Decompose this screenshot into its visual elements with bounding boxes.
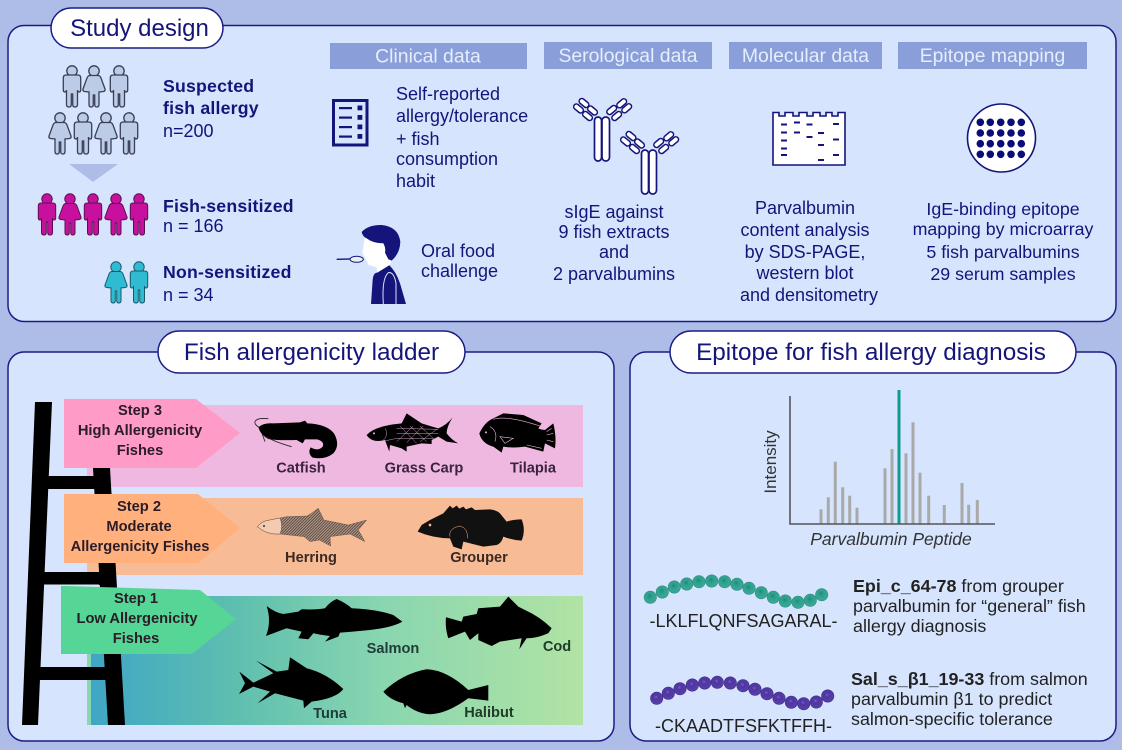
fish: catfish xyxy=(255,418,337,458)
text: sIgE: 9 fish extracts xyxy=(558,222,670,242)
header: clinical data xyxy=(330,43,527,69)
arrow: step 3 xyxy=(64,399,240,468)
icon: fish-sensitized people xyxy=(38,194,148,235)
sequence: teal: -LKLFLQNFSAGARAL- xyxy=(649,611,838,631)
labels: low allergenicity fishes: Salmon xyxy=(367,641,419,657)
icon: suspected group people xyxy=(49,66,138,154)
text: Epi_c_64-78: parvalbumin for “general” fish xyxy=(853,596,1086,616)
arrow: step 1: Low Allergenicity xyxy=(76,611,198,627)
text: oral food challenge: Oral food xyxy=(421,241,495,261)
labels: moderate allergenicity fishes: Grouper xyxy=(450,550,508,566)
text: suspected fish allergy: n=200 xyxy=(163,121,214,141)
ladder xyxy=(22,402,125,725)
text: IgE-binding epitope mapping: IgE-binding epitope xyxy=(926,199,1080,219)
text: self-reported allergy: consumption xyxy=(396,149,498,169)
heading: study design xyxy=(51,8,223,48)
text: fish-sensitized: n = 166 xyxy=(163,216,224,236)
text: IgE-binding epitope mapping: 29 serum samples xyxy=(930,264,1076,284)
icon: person eating from spoon xyxy=(337,225,406,304)
arrow: step 3: Fishes xyxy=(117,443,163,459)
text: sIgE: sIgE against xyxy=(564,202,664,222)
sequence: purple: -CKAADTFSFKTFFH- xyxy=(655,716,832,736)
icon: antibodies xyxy=(573,97,680,194)
labels: low allergenicity fishes xyxy=(313,639,571,722)
panel: fish allergenicity ladder xyxy=(8,331,614,741)
header: epitope mapping xyxy=(898,42,1087,69)
arrow: step 2: Moderate xyxy=(106,519,172,535)
heading: epitope for diagnosis: Epitope for fish allergy diagnosis xyxy=(696,339,1046,366)
icon: microarray xyxy=(968,104,1036,172)
labels: low allergenicity fishes: Halibut xyxy=(464,705,514,721)
text: IgE-binding epitope mapping: 5 fish parvalbumins xyxy=(926,242,1080,262)
bar chart: intensity by peptide xyxy=(761,390,995,549)
icon: gel xyxy=(773,112,845,165)
arrow: down triangle xyxy=(69,164,118,182)
text: Epi_c_64-78: allergy diagnosis xyxy=(853,616,986,636)
labels: high allergenicity fishes: Grass Carp xyxy=(385,460,463,476)
panel: epitope for fish allergy diagnosis xyxy=(630,331,1116,741)
arrow: step 1 xyxy=(61,586,236,654)
labels: moderate allergenicity fishes xyxy=(285,550,508,566)
band: moderate allergenicity xyxy=(87,498,583,575)
bar chart: intensity by peptide: Parvalbumin Peptide xyxy=(810,529,972,549)
header: molecular data: Molecular data xyxy=(742,45,869,67)
text: sIgE: 2 parvalbumins xyxy=(553,264,675,284)
text: fish-sensitized: Fish-sensitized xyxy=(163,196,294,216)
text: oral food challenge: challenge xyxy=(421,261,498,281)
labels: high allergenicity fishes: Tilapia xyxy=(510,460,557,476)
arrow: step 2: Step 2 xyxy=(117,499,161,515)
text: self-reported allergy: Self-reported xyxy=(396,84,500,104)
heading: fish allergenicity ladder: Fish allergenicity ladder xyxy=(184,339,439,366)
heading: fish allergenicity ladder xyxy=(158,331,465,373)
fish: halibut xyxy=(383,669,488,714)
text: IgE-binding epitope mapping: mapping by microarray xyxy=(913,219,1094,239)
peptide chain: teal xyxy=(644,575,828,608)
text: suspected fish allergy: Suspected xyxy=(163,76,254,96)
arrow: step 3: Step 3 xyxy=(118,403,162,419)
heading: epitope for diagnosis xyxy=(670,331,1076,373)
text: non-sensitized: n = 34 xyxy=(163,285,214,305)
fish: cod xyxy=(446,597,552,649)
panel: study design xyxy=(8,8,1116,322)
text: Sal_s_β1_19-33: salmon-specific tolerance xyxy=(851,709,1053,729)
text: self-reported allergy: allergy/tolerance xyxy=(396,106,528,126)
text: self-reported allergy: habit xyxy=(396,171,435,191)
peptide chain: purple xyxy=(650,676,834,710)
text: Epi_c_64-78: from grouper xyxy=(956,576,1064,596)
icon: checklist xyxy=(334,100,367,145)
labels: high allergenicity fishes: Catfish xyxy=(276,460,326,476)
band: high allergenicity xyxy=(87,405,583,487)
text: parvalbumin content analysis: Parvalbumin xyxy=(755,198,855,218)
header: serological data: Serological data xyxy=(558,45,698,67)
fish: tuna xyxy=(239,657,343,708)
arrow: step 2 xyxy=(64,494,240,563)
text: Sal_s_β1_19-33: from salmon xyxy=(984,669,1088,689)
text: Sal_s_β1_19-33: parvalbumin β1 to predict xyxy=(851,689,1052,709)
labels: moderate allergenicity fishes: Herring xyxy=(285,550,337,566)
heading: study design: Study design xyxy=(70,15,209,42)
text: suspected fish allergy: fish allergy xyxy=(163,98,259,118)
text: parvalbumin content analysis: western blot xyxy=(755,263,854,283)
fish: salmon xyxy=(266,599,402,642)
text: parvalbumin content analysis: and densitometry xyxy=(740,285,878,305)
text: sIgE: and xyxy=(599,242,629,262)
fish: herring xyxy=(257,508,367,546)
arrow: step 3: High Allergenicity xyxy=(78,423,203,439)
header: epitope mapping: Epitope mapping xyxy=(920,45,1065,67)
header: molecular data xyxy=(729,42,882,69)
labels: low allergenicity fishes: Tuna xyxy=(313,706,348,722)
bar chart: intensity by peptide: Intensity xyxy=(761,430,780,494)
arrow: step 2: Allergenicity Fishes xyxy=(71,539,209,555)
fish: grass carp xyxy=(367,413,458,452)
icon: non-sensitized people xyxy=(105,262,148,303)
labels: high allergenicity fishes xyxy=(276,460,557,476)
band: low allergenicity xyxy=(87,596,583,725)
text: parvalbumin content analysis: content analysis xyxy=(740,220,870,240)
header: serological data xyxy=(544,42,712,69)
text: parvalbumin content analysis: by SDS-PAGE, xyxy=(745,242,865,262)
text: self-reported allergy: + fish xyxy=(396,129,440,149)
arrow: step 1: Fishes xyxy=(113,631,159,647)
text: Epi_c_64-78: Epi_c_64-78 xyxy=(853,576,956,596)
arrow: step 1: Step 1 xyxy=(114,591,158,607)
fish: tilapia xyxy=(479,413,556,453)
header: clinical data: Clinical data xyxy=(375,46,481,68)
text: non-sensitized: Non-sensitized xyxy=(163,262,292,282)
fish: grouper xyxy=(418,506,524,549)
labels: low allergenicity fishes: Cod xyxy=(543,639,571,655)
text: Sal_s_β1_19-33: Sal_s_β1_19-33 xyxy=(851,669,984,689)
